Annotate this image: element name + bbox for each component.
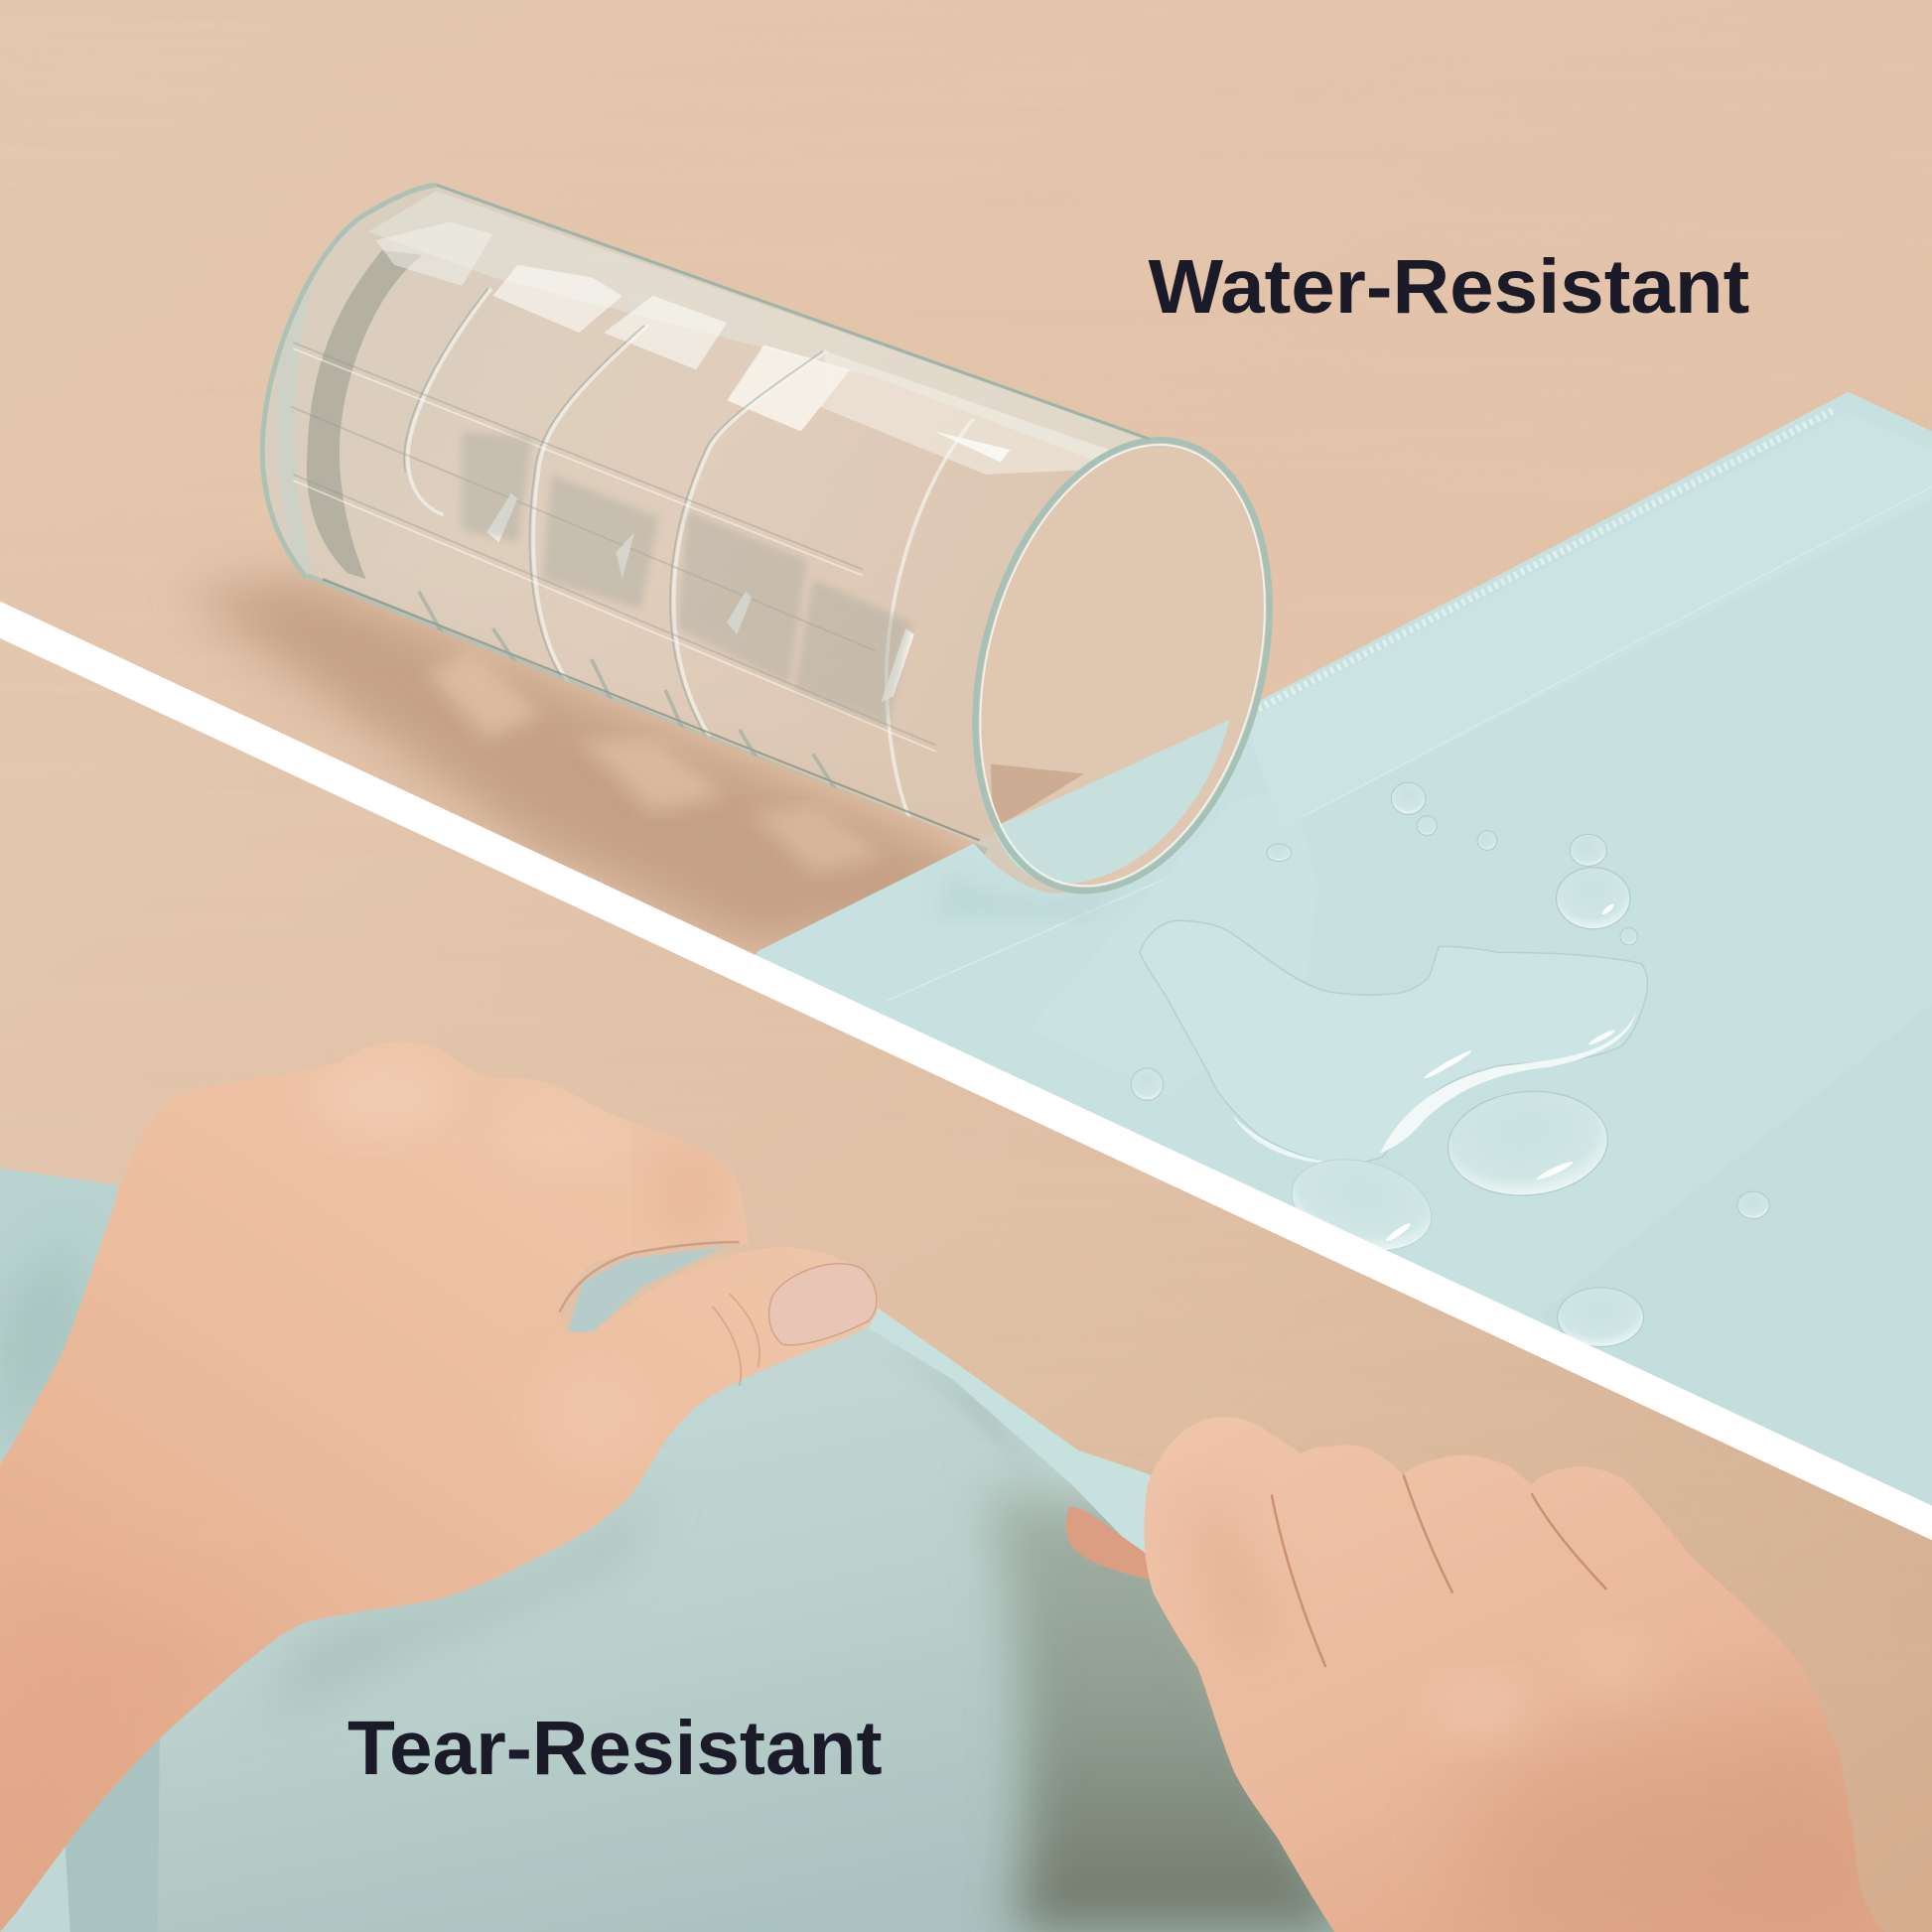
folder seen through mouth [993,720,1230,885]
left hand shading [0,1059,727,1932]
glass lower base edge [307,578,986,853]
folder left flap [62,1688,160,1932]
heading: Water-Resistant: Water-Resistant [1149,244,1749,330]
glass rim [972,437,1273,894]
right hand shading [1182,1491,1872,1932]
glass contact shadow on folder [951,888,1091,917]
folder inner pocket panels [888,486,1932,1001]
folder edge by left thumb [568,1247,724,1332]
glass horizontal facet lines [291,343,936,746]
folder stitched seam [1252,409,1836,712]
left knuckle creases [712,1294,759,1386]
glass vertical facet rings [408,288,973,838]
water puddle [1140,920,1648,1164]
shadow on folder under right hand [986,1491,1349,1932]
icon: left hand [0,1042,879,1932]
glass mouth interior [1072,447,1253,888]
glass upper ribbed reflections [368,191,1149,466]
glass left dark band [307,250,423,579]
glass central sparkle facets [486,431,1011,702]
glass shadow on table [185,579,986,949]
icon: right hand [1066,1417,1885,1932]
panel: bottom folder [0,1169,1349,1932]
wood table background: bottom half [0,592,1932,1932]
heading: Tear-Resistant: Tear-Resistant [347,1706,883,1791]
divider: white diagonal band [0,602,1932,1540]
glass: tumbler lying on side [262,185,1316,924]
curled folder strip [869,1309,1151,1560]
right finger creases [1272,1475,1606,1667]
left thumbnail [769,1264,877,1345]
shadow under wrist on folder [259,1478,665,1725]
panel: top folder [740,392,1932,1601]
water droplets [1131,782,1769,1346]
web crease of left hand [559,1242,740,1312]
